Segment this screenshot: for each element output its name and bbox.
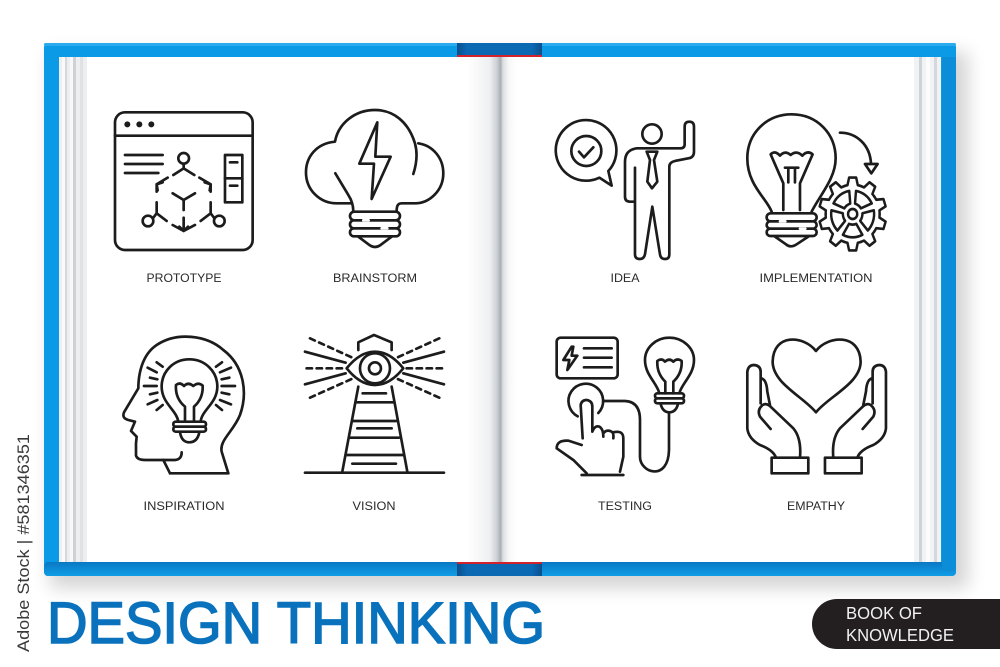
label: vision: VISION bbox=[352, 499, 396, 513]
book spine top bbox=[457, 43, 542, 57]
label: prototype: PROTOTYPE bbox=[146, 271, 222, 285]
book cover bbox=[44, 43, 968, 588]
icon: implementation bbox=[747, 114, 887, 250]
label: empathy: EMPATHY bbox=[787, 499, 845, 513]
badge: book of knowledge bbox=[812, 599, 1000, 649]
label: inspiration: INSPIRATION bbox=[144, 499, 224, 513]
badge: book of knowledge: BOOK OF bbox=[846, 603, 922, 623]
label: testing: TESTING bbox=[598, 499, 652, 513]
icon: brainstorm bbox=[306, 110, 443, 247]
icon: idea bbox=[556, 120, 694, 259]
icon: inspiration bbox=[123, 337, 244, 473]
book spine bottom bbox=[457, 562, 542, 576]
title: DESIGN THINKING bbox=[47, 591, 545, 656]
stock credit: Adobe Stock | #581346351 bbox=[15, 434, 33, 652]
icon: testing bbox=[557, 338, 694, 475]
label: brainstorm: BRAINSTORM bbox=[333, 271, 417, 285]
badge: book of knowledge: KNOWLEDGE bbox=[846, 625, 954, 645]
icon: prototype bbox=[115, 112, 253, 250]
label: implementation: IMPLEMENTATION bbox=[760, 271, 872, 285]
icon: vision bbox=[305, 335, 444, 473]
icon: empathy bbox=[747, 340, 886, 473]
book pages bbox=[59, 57, 941, 562]
label: idea: IDEA bbox=[610, 271, 640, 285]
